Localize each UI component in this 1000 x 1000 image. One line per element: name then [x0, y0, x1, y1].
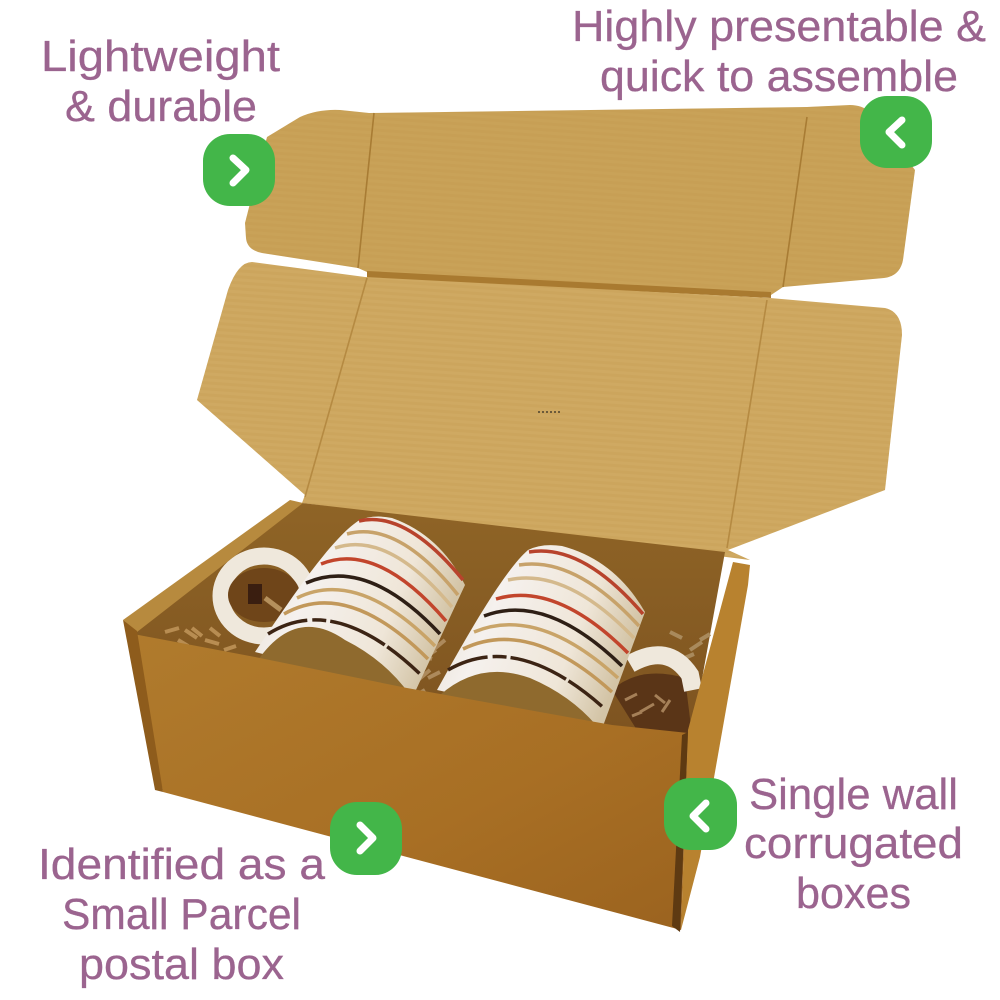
label: highly presentable: quick to assemble — [600, 52, 958, 101]
dark shred pile — [612, 674, 692, 735]
mug base — [258, 627, 410, 695]
left mug — [221, 517, 465, 695]
mug stripes — [268, 520, 463, 675]
label: highly presentable — [572, 2, 986, 101]
box interior — [128, 503, 725, 745]
label: lightweight and durable — [41, 32, 280, 131]
mug handle — [630, 655, 693, 690]
label: small parcel: Identified as a — [38, 840, 326, 889]
left wall edge — [123, 500, 303, 632]
mug body — [437, 545, 645, 726]
button: lightweight — [203, 134, 275, 206]
right mug — [437, 545, 693, 726]
button: presentable — [860, 96, 932, 168]
label: lightweight and durable: & durable — [65, 82, 257, 131]
packing shred — [165, 600, 710, 735]
lower lid — [197, 262, 902, 560]
label: single wall: boxes — [796, 869, 911, 918]
lower lid fold lines — [305, 278, 767, 548]
label: single wall: Single wall — [749, 770, 958, 819]
label: single wall: corrugated — [744, 819, 963, 868]
mug base — [440, 672, 596, 725]
right corner shadow — [672, 732, 688, 932]
lid print marks — [538, 411, 560, 413]
label: highly presentable: Highly presentable & — [572, 2, 986, 51]
right side panel — [681, 562, 750, 930]
button: single wall — [664, 778, 737, 850]
handle opening — [228, 568, 300, 622]
mug handle — [221, 556, 307, 636]
lid fold lines — [358, 113, 807, 287]
label: small parcel — [38, 840, 326, 989]
button: small parcel — [330, 802, 402, 875]
label: small parcel: postal box — [79, 940, 284, 989]
label: single wall — [744, 770, 963, 918]
box illustration — [123, 105, 915, 932]
front panel — [128, 633, 688, 930]
mug body — [255, 517, 465, 692]
left folded corner — [123, 620, 163, 792]
mug stripes — [448, 551, 643, 709]
label: lightweight and durable: Lightweight — [41, 32, 280, 81]
label: small parcel: Small Parcel — [62, 890, 301, 939]
upper lid — [245, 105, 915, 298]
